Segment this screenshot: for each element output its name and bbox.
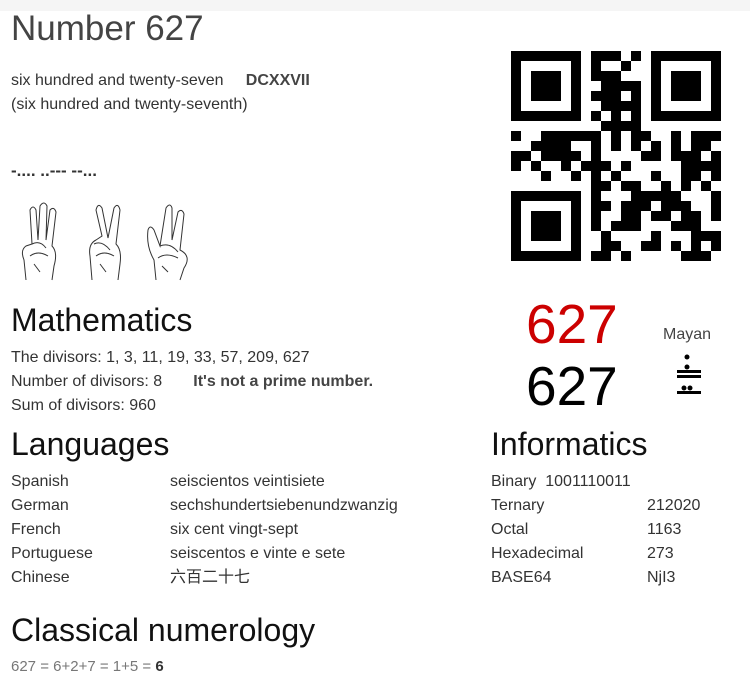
text: Hexadecimal	[491, 545, 583, 562]
title: Number 627	[11, 9, 204, 48]
text: BASE64	[491, 569, 551, 586]
morse code: -.... ..--- --...	[11, 161, 97, 180]
heading: Mathematics: Mathematics	[11, 302, 192, 338]
text: math facts: Sum of divisors: 960	[11, 397, 156, 414]
text: math facts	[11, 349, 373, 414]
mayan numeral	[663, 326, 711, 394]
table: languages	[11, 473, 398, 586]
text: Spanish	[11, 473, 69, 490]
heading: Classical numerology: Classical numerology	[11, 612, 315, 648]
text: Portuguese	[11, 545, 93, 562]
heading: Languages: Languages	[11, 426, 169, 462]
QR code	[511, 51, 721, 261]
icon: sign language hands	[22, 202, 188, 280]
text: Chinese	[11, 569, 70, 586]
table: informatics	[491, 473, 700, 586]
heading: Informatics: Informatics	[491, 426, 647, 462]
text: NjI3	[647, 569, 675, 586]
text: 212020	[647, 497, 700, 514]
text: 273	[647, 545, 674, 562]
text: French	[11, 521, 61, 538]
text: Binary 1001110011	[491, 473, 631, 490]
big number red: 627	[526, 293, 618, 355]
text: 六百二十七	[170, 569, 250, 586]
text: seiscentos e vinte e sete	[170, 545, 345, 562]
text: math facts: Number of divisors: 8 It's not a prime number.	[11, 373, 373, 390]
text: sechshundertsiebenundzwanzig	[170, 497, 398, 514]
text: numerology: 627 = 6+2+7 = 1+5 = 6	[11, 658, 164, 675]
text: math facts: The divisors: 1, 3, 11, 19, 33, 57, 209, 627	[11, 349, 310, 366]
text: seiscientos veintisiete	[170, 473, 325, 490]
text: six cent vingt-sept	[170, 521, 298, 538]
text: Octal	[491, 521, 528, 538]
text: 1163	[647, 521, 681, 538]
text: German	[11, 497, 69, 514]
text: Ternary	[491, 497, 544, 514]
mayan numeral: Mayan	[663, 326, 711, 343]
text: names: (six hundred and twenty-seventh)	[11, 96, 248, 113]
big number black: 627	[526, 355, 618, 417]
text: names: six hundred and twenty-seven DCXXVII	[11, 72, 310, 89]
text: names	[11, 72, 310, 113]
